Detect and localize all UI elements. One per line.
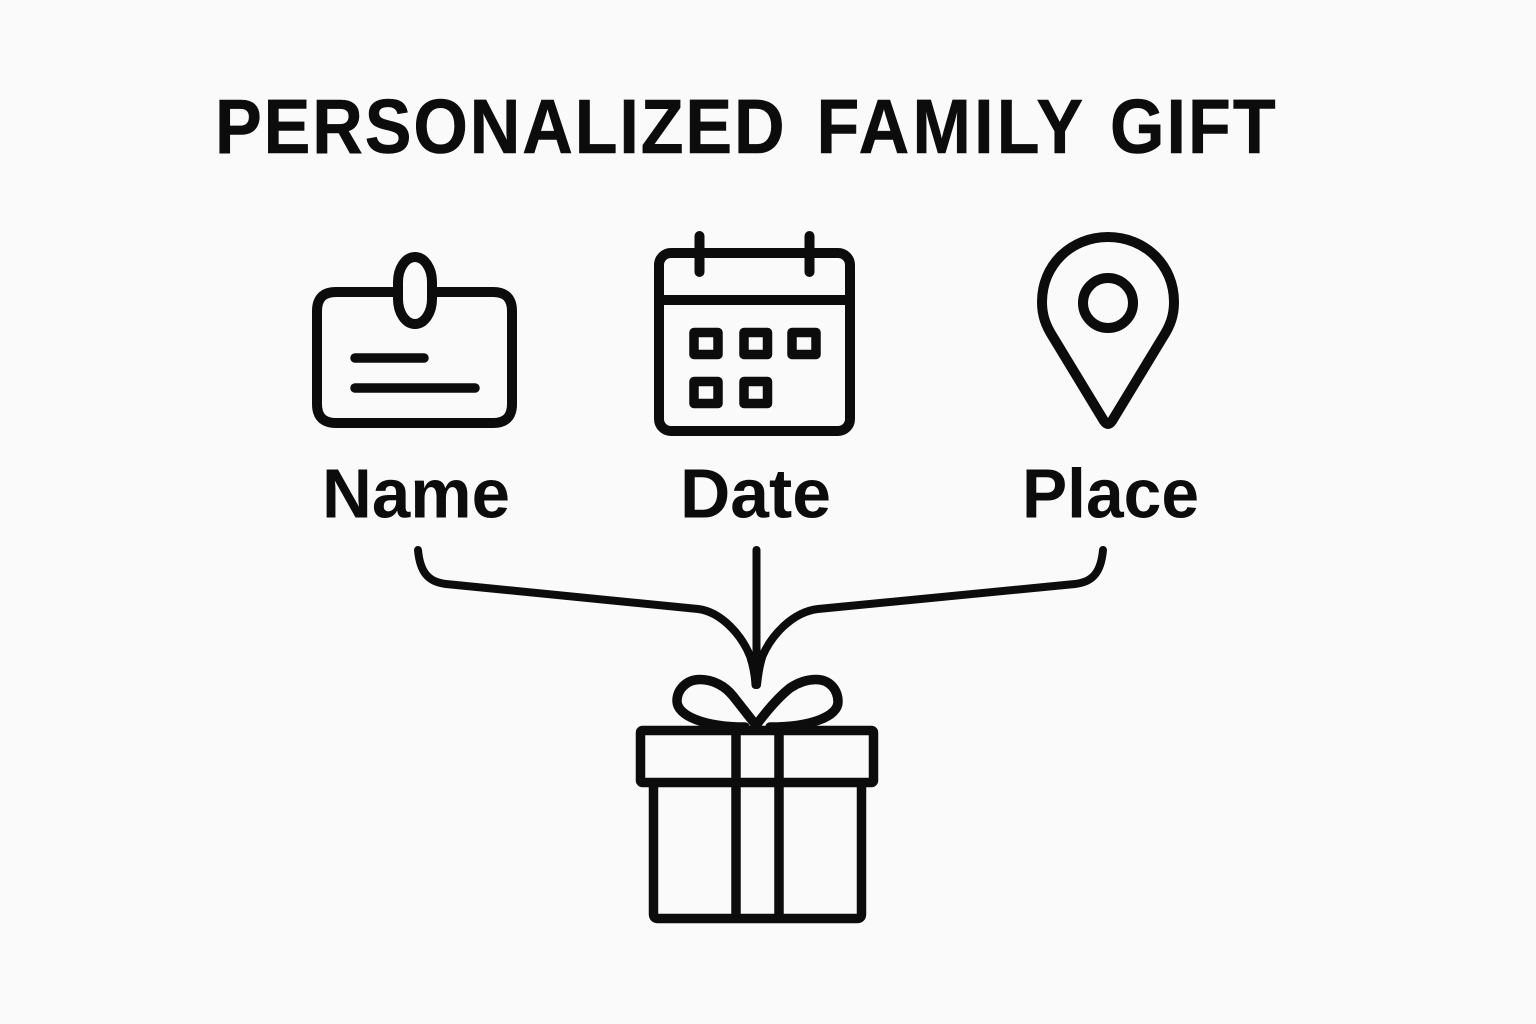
- title: PERSONALIZED: [215, 83, 785, 170]
- icon: calendar: [659, 236, 850, 431]
- icon: location pin: [1042, 237, 1174, 424]
- icon: gift box: [640, 680, 874, 918]
- label: Place: Place: [1022, 454, 1199, 532]
- title: GIFT: [1110, 83, 1276, 170]
- label: Date: Date: [680, 454, 831, 532]
- icon: name badge: [317, 257, 512, 423]
- title: [215, 83, 1276, 170]
- label: Name: Name: [322, 454, 510, 532]
- arrow: connectors converging on gift: [418, 550, 1103, 685]
- title: FAMILY: [816, 83, 1083, 170]
